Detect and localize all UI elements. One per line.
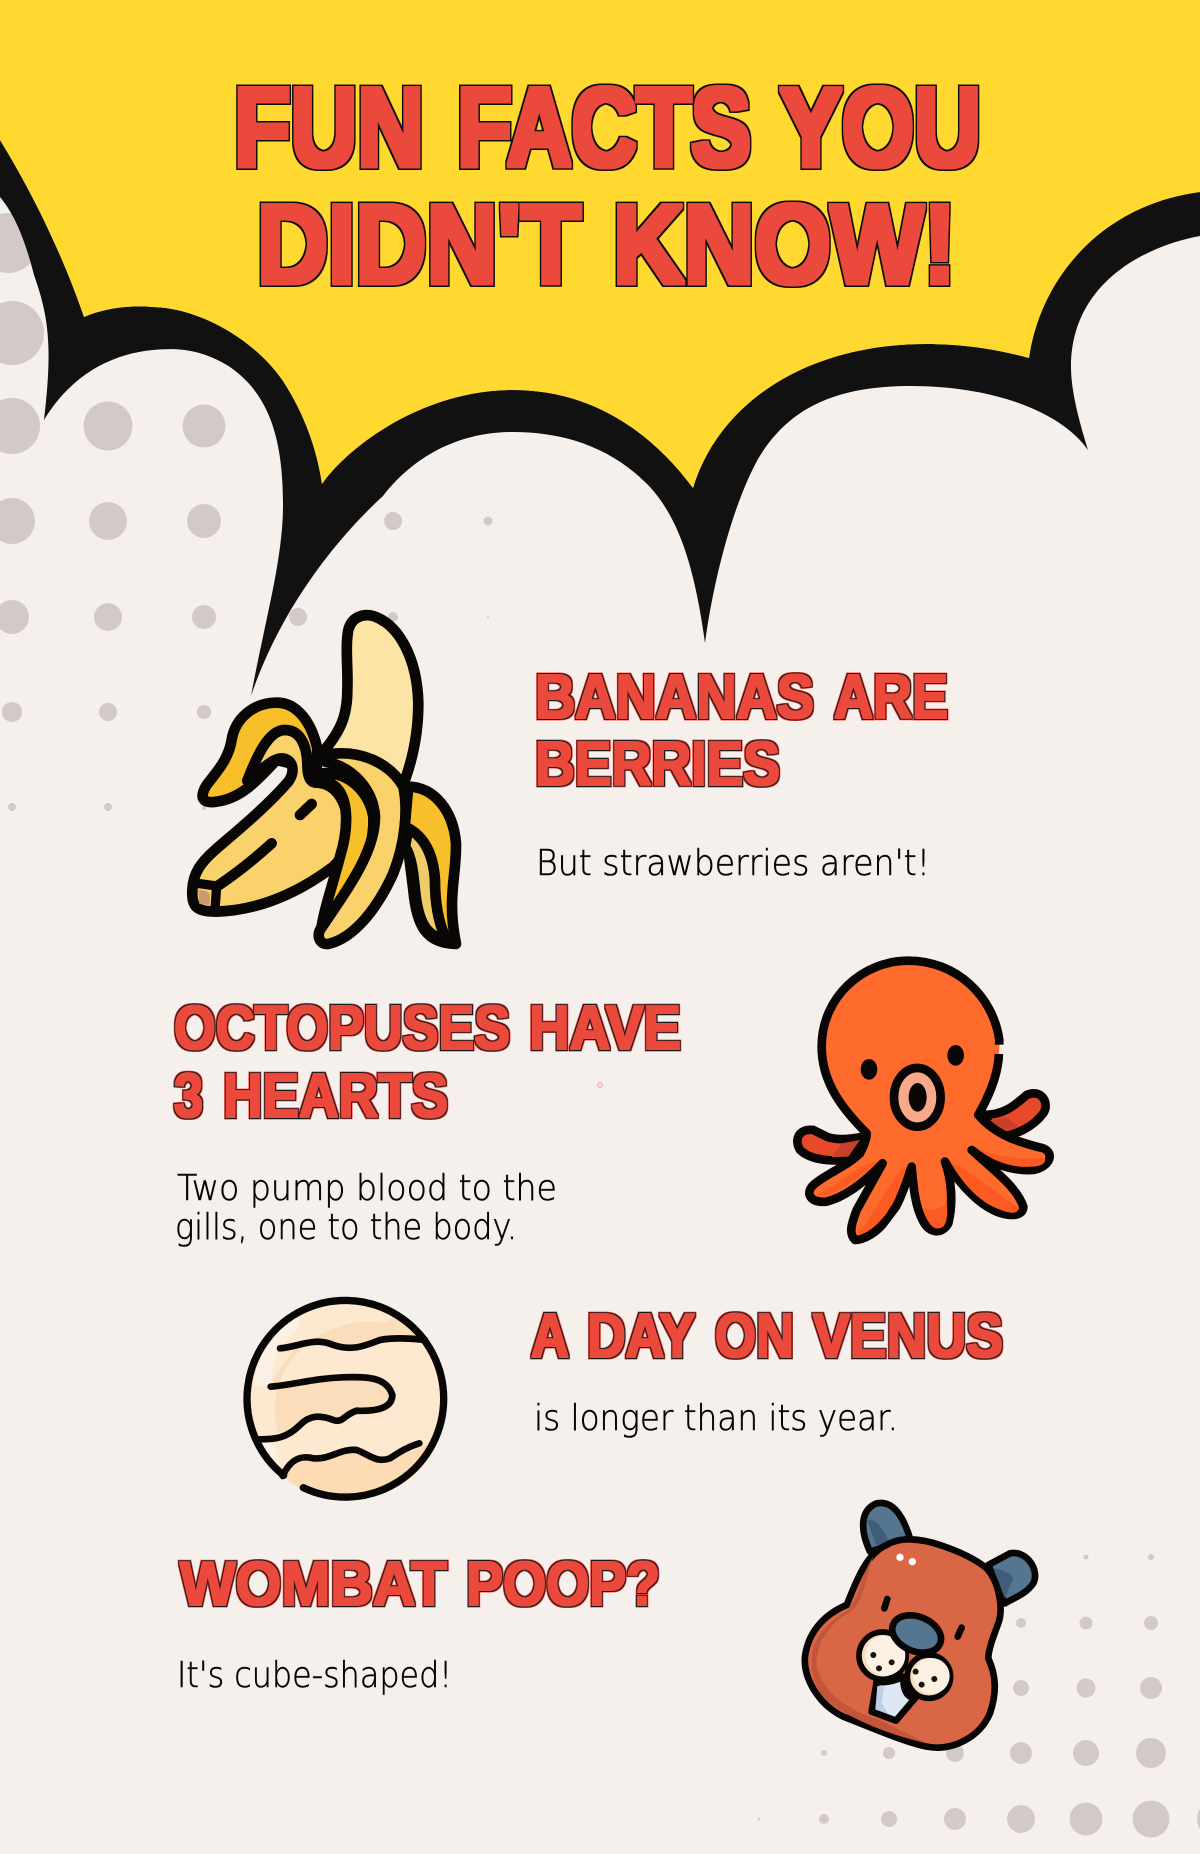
heading: venus [531, 1302, 1003, 1371]
right peel [405, 787, 456, 944]
title: DIDN'T [257, 182, 581, 307]
heading: octopuses: HAVE [529, 994, 681, 1063]
heading: bananas: BERRIES [535, 730, 780, 799]
peel strips [315, 773, 373, 937]
text: bananas: But strawberries aren't! [536, 843, 930, 884]
heading: venus: ON [715, 1302, 794, 1371]
heading: bananas: ARE [834, 663, 948, 732]
heading: venus: A [531, 1302, 569, 1371]
halftone dots: top left [0, 213, 492, 811]
text: octopuses [175, 1168, 557, 1248]
ears [863, 1503, 910, 1552]
head shading [811, 1557, 927, 1743]
highlights [896, 1554, 916, 1565]
heading: wombat [180, 1550, 660, 1619]
burst yellow fill [0, 0, 1200, 488]
head [805, 1539, 1001, 1748]
title [234, 65, 981, 307]
planet disc [248, 1301, 445, 1498]
burst black outline [0, 140, 1200, 696]
text: venus: is longer than its year. [534, 1398, 898, 1439]
text: octopuses: gills, one to the body. [175, 1207, 517, 1248]
text: octopuses: Two pump blood to the [177, 1168, 557, 1209]
head and front arms [809, 961, 1050, 1240]
left peel [203, 703, 317, 802]
nose [887, 1608, 947, 1660]
heading: bananas [535, 663, 948, 799]
halftone dots: bottom right [758, 1554, 1200, 1838]
heading: bananas: BANANAS [535, 663, 814, 732]
eyes [861, 1045, 964, 1080]
bands [273, 1317, 420, 1435]
heading: octopuses: OCTOPUSES [174, 994, 510, 1063]
outline and wavy lines [247, 1300, 444, 1497]
mouth [894, 1068, 941, 1127]
tooth [872, 1677, 915, 1721]
title: FACTS [457, 65, 751, 190]
whisker dots and eyes [870, 1652, 937, 1688]
icon: wombat [805, 1503, 1035, 1748]
comic burst header [0, 0, 1200, 696]
title: YOU [780, 65, 981, 190]
heading: octopuses [174, 994, 681, 1131]
text: wombat: It's cube-shaped! [177, 1655, 452, 1696]
heading: octopuses: 3 [174, 1062, 203, 1131]
banana body [192, 730, 348, 912]
heading: venus: DAY [587, 1302, 695, 1371]
icon: banana [192, 615, 456, 944]
heading: wombat: WOMBAT [180, 1550, 447, 1619]
pink marker dot [594, 1079, 606, 1091]
icon: venus [247, 1300, 445, 1498]
heading: octopuses: HEARTS [223, 1062, 448, 1131]
title: KNOW! [613, 182, 956, 307]
gap in outline [997, 1045, 1002, 1054]
back arms [797, 1130, 863, 1161]
tentacle shading [977, 1148, 1045, 1167]
inner banana fruit [323, 615, 418, 780]
cheeks [859, 1632, 951, 1698]
nose and marks [198, 890, 210, 905]
cheek highlights [865, 1636, 950, 1694]
heading: wombat: POOP? [466, 1550, 660, 1619]
icon: octopus [797, 961, 1050, 1240]
title: FUN [234, 65, 424, 190]
heading: venus: VENUS [813, 1302, 1003, 1371]
